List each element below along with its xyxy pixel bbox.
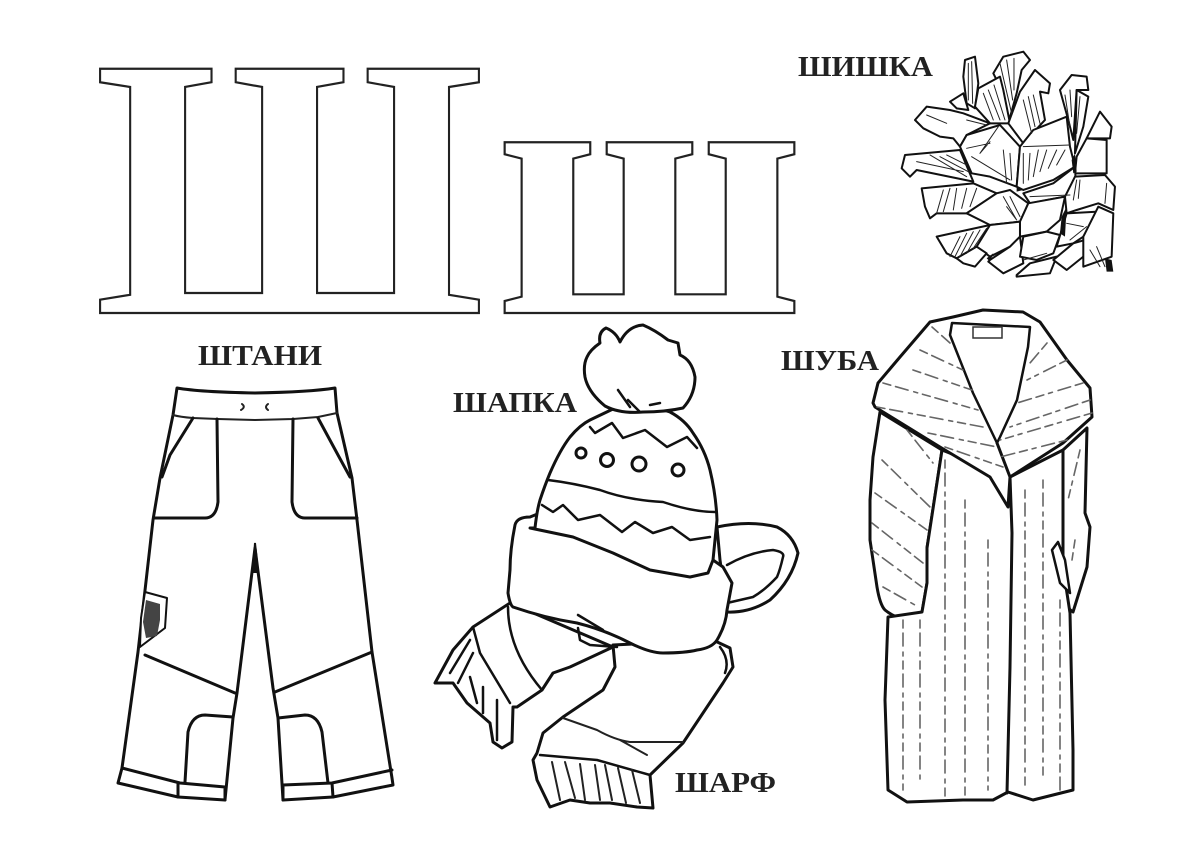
coat body bbox=[885, 450, 1073, 802]
coat right sleeve bbox=[1063, 428, 1090, 612]
scarf back loop bbox=[717, 524, 798, 612]
icon: hat and scarf bbox=[435, 325, 798, 808]
coat collar bbox=[873, 310, 1092, 507]
hat bbox=[530, 408, 717, 577]
label: шарф: ШАРФ bbox=[675, 767, 776, 799]
icon: fur coat bbox=[870, 310, 1092, 802]
scarf right end bbox=[533, 640, 733, 808]
icon: trousers bbox=[118, 388, 393, 800]
pompom bbox=[584, 325, 695, 412]
label: шуба: ШУБА bbox=[781, 345, 879, 377]
label: шапка: ШАПКА bbox=[453, 387, 577, 419]
icon: pine cone bbox=[902, 52, 1115, 277]
scarf neck wrap bbox=[508, 505, 732, 653]
label: штани: ШТАНИ bbox=[198, 340, 322, 372]
coat left sleeve bbox=[870, 412, 943, 618]
trouser badge bbox=[140, 592, 167, 647]
scarf left end bbox=[435, 603, 613, 748]
label: шишка: ШИШКА bbox=[798, 51, 933, 83]
